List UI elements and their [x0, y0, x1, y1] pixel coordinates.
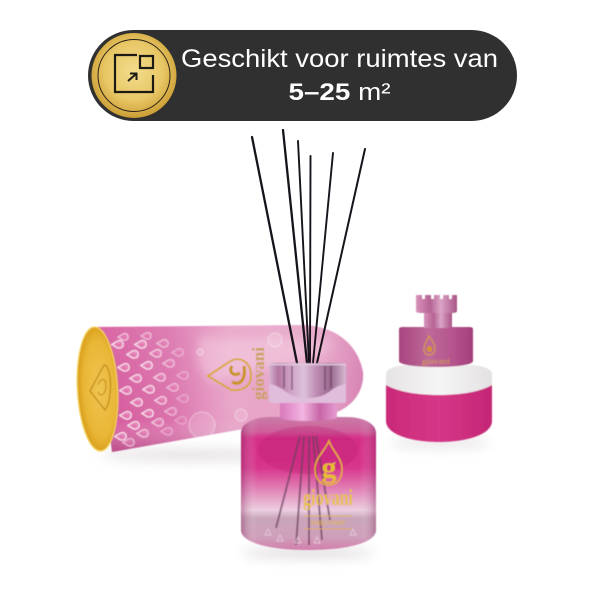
lid mid cylinder — [399, 327, 473, 367]
badge: room size — [88, 30, 517, 121]
lid gold logo — [424, 336, 435, 355]
badge pill background — [88, 30, 517, 121]
lid brand text: giovani — [422, 357, 451, 366]
tube brand name: giovani — [249, 347, 268, 400]
tube open end gold — [74, 326, 121, 452]
diffuser sticks — [252, 130, 365, 363]
lid pink base — [386, 375, 492, 442]
bottle gold drop logo — [315, 441, 342, 485]
bottle brand name: giovani — [303, 485, 353, 510]
badge text line 1: Geschikt voor ruimtes van — [181, 45, 498, 73]
bottle product label: BUBBLE POWER — [311, 520, 345, 527]
tube body — [96, 325, 363, 452]
diffuser bottle — [241, 363, 376, 550]
bottle liquid speckle — [265, 529, 356, 543]
lid set — [386, 295, 492, 442]
lid neck — [424, 312, 452, 328]
tube heart pattern — [112, 332, 188, 446]
inner reflection — [258, 426, 358, 474]
bottle neck — [280, 403, 337, 421]
bottle gold drop logo: g — [322, 451, 336, 484]
tube bubbles — [189, 333, 282, 438]
tube gold logo — [208, 359, 251, 390]
lid white band — [386, 365, 492, 395]
shadows under products — [100, 439, 490, 558]
bottle product label — [304, 516, 352, 529]
tube light swirl — [197, 335, 335, 385]
badge text line 2: 5–25 m² — [288, 79, 391, 106]
lid crown — [416, 295, 457, 313]
icon: gold medallion with room expand symbol — [92, 33, 176, 118]
packaging tube — [74, 325, 363, 452]
sticks seen through glass — [276, 436, 330, 545]
bottle cap — [269, 363, 346, 403]
bottle glass body — [241, 417, 376, 550]
